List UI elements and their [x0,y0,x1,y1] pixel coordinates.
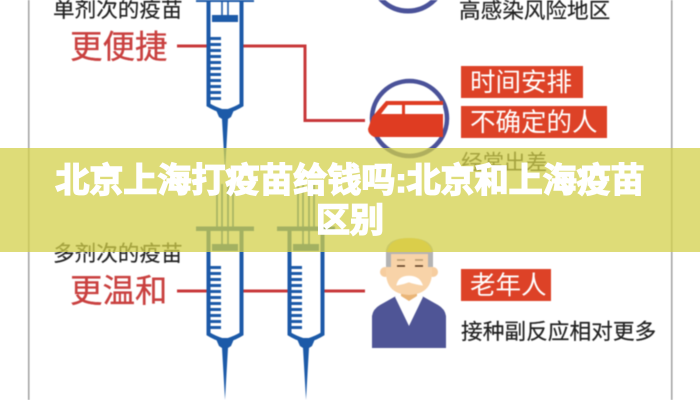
tag: uncertain schedule line 1: 时间安排 [470,69,572,97]
icon: lower right syringe [277,184,335,400]
icon: top circle [371,0,445,11]
label: gentler: 更温和 [70,273,168,309]
label: more side effects: 接种副反应相对更多 [461,319,656,344]
icon: lower left syringe [196,184,254,400]
label: more convenient: 更便捷 [70,29,168,65]
title [55,162,645,240]
icon: train [368,81,447,156]
title banner [0,148,700,252]
left border line [28,0,30,400]
icon: elderly man [372,238,446,348]
title: 北京上海打疫苗给钱吗:北京和上海疫苗 [55,162,645,200]
lower connector lines [177,290,365,292]
icon: upper syringe [196,0,254,171]
label: frequent travel: 经常出差 [461,150,547,175]
label: multiple doses: 多剂次的疫苗 [53,241,183,266]
right border line [671,0,672,400]
tag: elderly: 老年人 [470,272,547,300]
title: 区别 [316,202,384,240]
tag: uncertain schedule line 2: 不确定的人 [470,109,598,137]
upper connector lines [177,46,365,120]
